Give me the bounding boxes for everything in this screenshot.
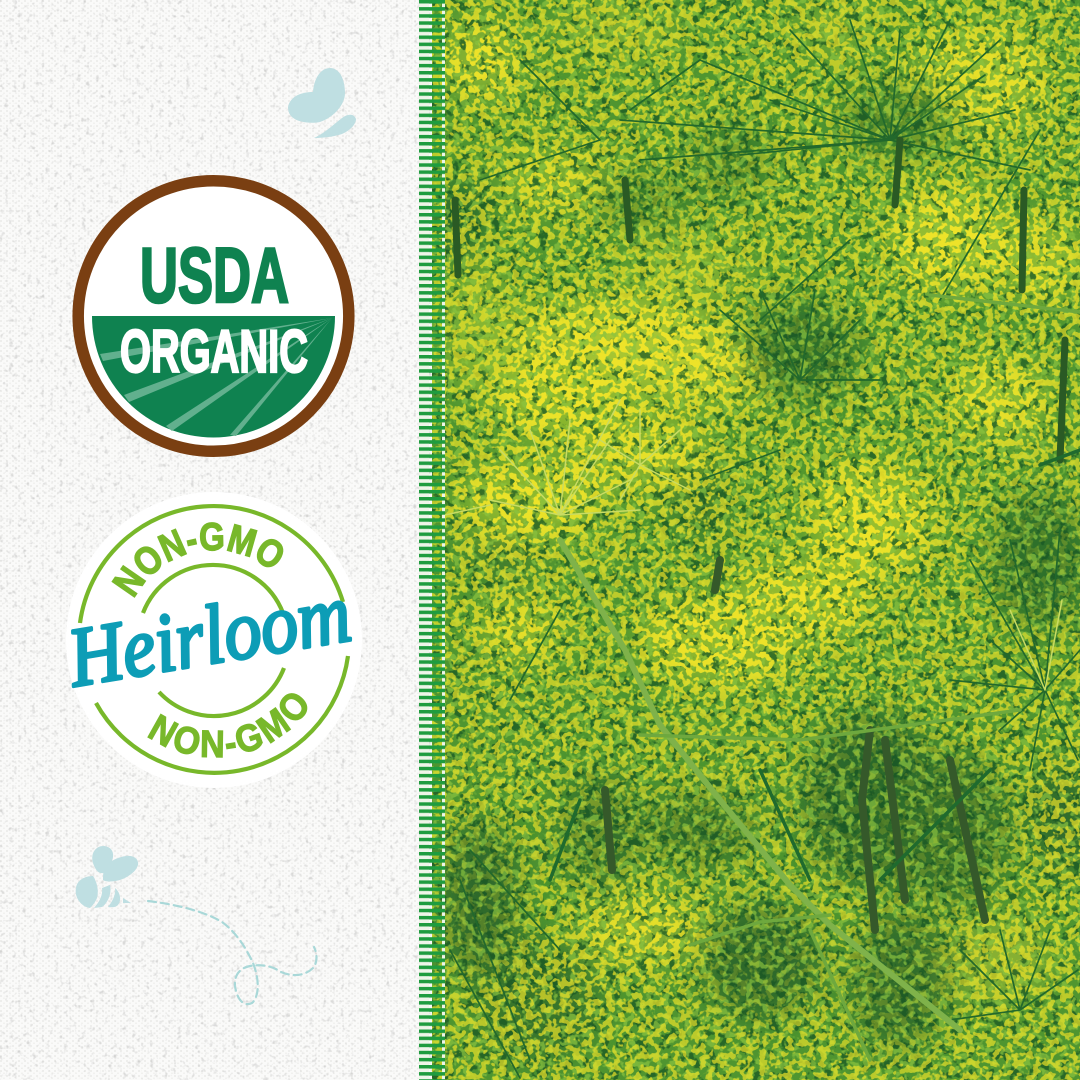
field furrow rays	[100, 318, 332, 436]
icon: butterfly	[288, 68, 356, 138]
green stitched edge strip	[419, 0, 445, 1080]
icon: bee	[76, 846, 138, 908]
badge: USDA Organic	[78, 181, 349, 451]
green field half-disc	[92, 316, 335, 438]
badge: Non-GMO Heirloom	[61, 492, 362, 788]
panel: dill photograph	[432, 0, 1080, 1080]
bee flight dashed trail	[148, 901, 316, 1004]
panel: linen background	[0, 0, 432, 1080]
ORGANIC wordmark: ORGANIC	[120, 318, 308, 385]
umbels: radiating spokes	[450, 20, 1080, 1078]
stems	[455, 140, 1080, 1060]
badge ring	[78, 181, 349, 451]
Heirloom script: Heirloom	[61, 567, 357, 705]
white badge backing	[66, 492, 362, 788]
outer and inner green arcs	[80, 506, 348, 773]
NON-GMO bottom text: NON-GMO	[147, 693, 308, 758]
USDA wordmark: USDA	[140, 231, 289, 319]
NON-GMO top text: NON-GMO	[111, 522, 284, 598]
